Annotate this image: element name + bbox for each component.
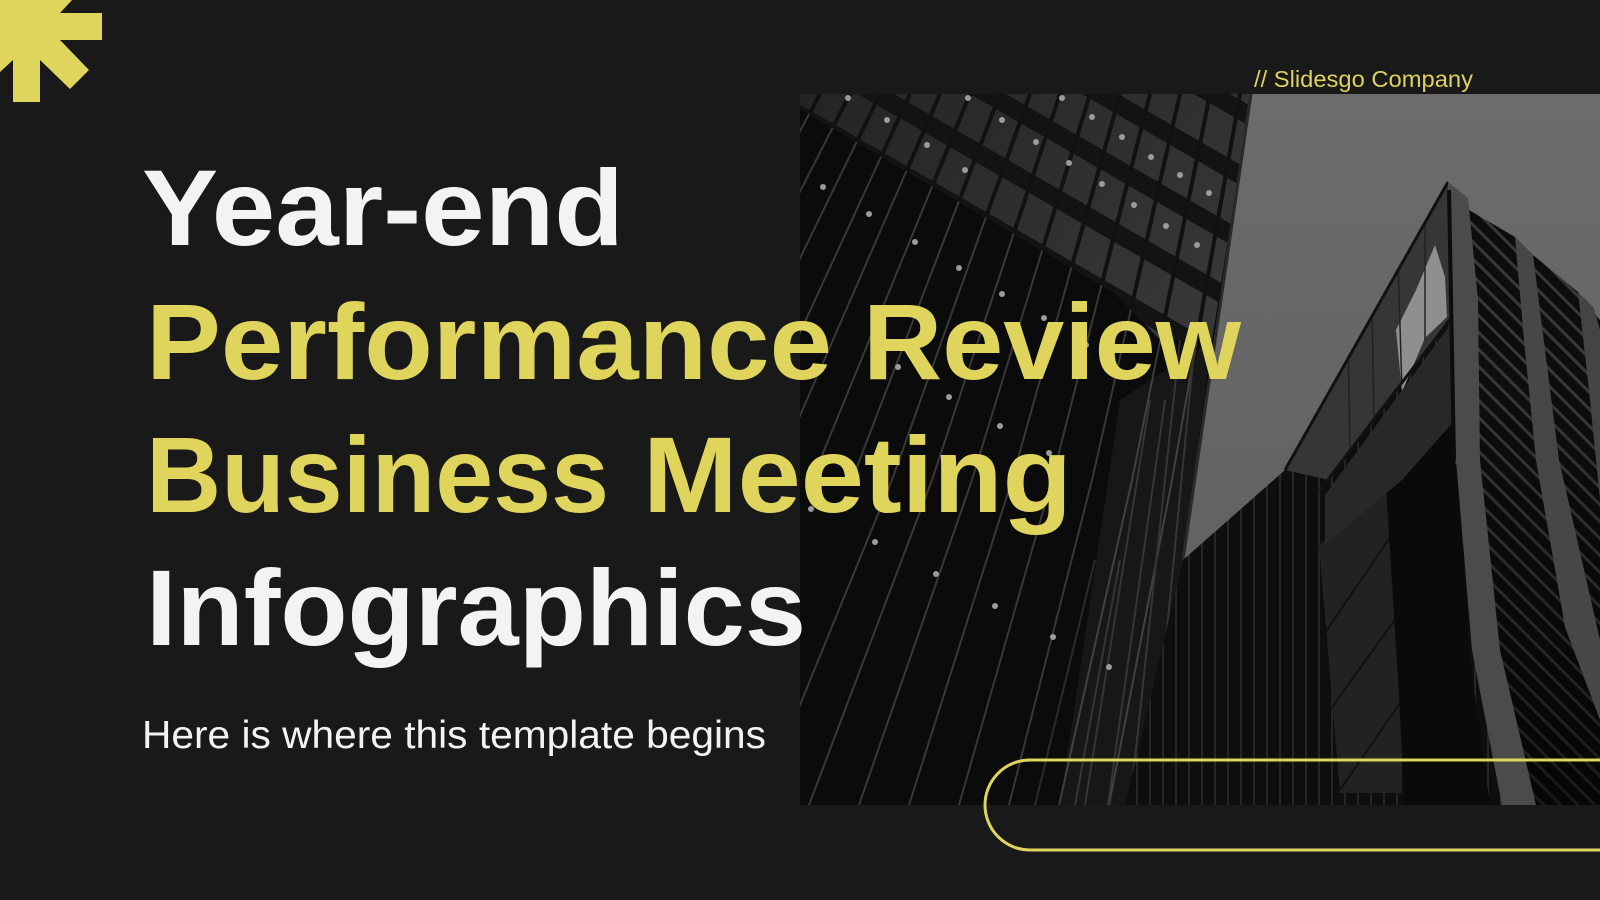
title line: Performance Review bbox=[146, 281, 1242, 402]
third column bbox=[1578, 292, 1600, 500]
title line: Performance Review: Performance bbox=[146, 281, 832, 402]
subtitle: Here is where this template begins bbox=[142, 714, 766, 757]
title line: Performance Review: Review bbox=[863, 281, 1242, 402]
lit glass panels bbox=[1319, 480, 1402, 793]
sky bbox=[1182, 94, 1600, 566]
upper glass wedge bbox=[1285, 182, 1452, 480]
photo: dark skyscrapers against grey sky bbox=[800, 94, 1600, 805]
second column bbox=[1515, 237, 1600, 720]
light dots on the facade bbox=[808, 95, 1212, 670]
glass panel dividers bbox=[1320, 520, 1402, 790]
eave beam bbox=[1285, 182, 1452, 490]
title bbox=[142, 147, 1242, 668]
glass mullions bbox=[1348, 210, 1425, 450]
lower facade with vertical fins bbox=[1125, 315, 1510, 805]
dark recess bbox=[1385, 420, 1490, 805]
title line: Business Meeting: Business bbox=[146, 414, 609, 535]
title line: Infographics: Infographics bbox=[146, 547, 806, 668]
corner column bbox=[1448, 182, 1536, 805]
slatted facade bbox=[1455, 210, 1600, 805]
column shadow line bbox=[1449, 190, 1454, 460]
title line: Business Meeting: Meeting bbox=[643, 414, 1072, 535]
glass reflection bbox=[1396, 245, 1447, 392]
outlined pill shape bbox=[985, 760, 1600, 850]
icon: asterisk star in corner bbox=[0, 0, 102, 102]
slat shading bbox=[1485, 504, 1600, 805]
middle glass bbox=[1325, 325, 1455, 545]
title line: Business Meeting bbox=[146, 414, 1072, 535]
title line: Year-end: Year-end bbox=[142, 147, 624, 268]
company label: // Slidesgo Company bbox=[1254, 66, 1474, 92]
right building bbox=[1125, 182, 1600, 805]
left tower bbox=[800, 94, 1252, 805]
